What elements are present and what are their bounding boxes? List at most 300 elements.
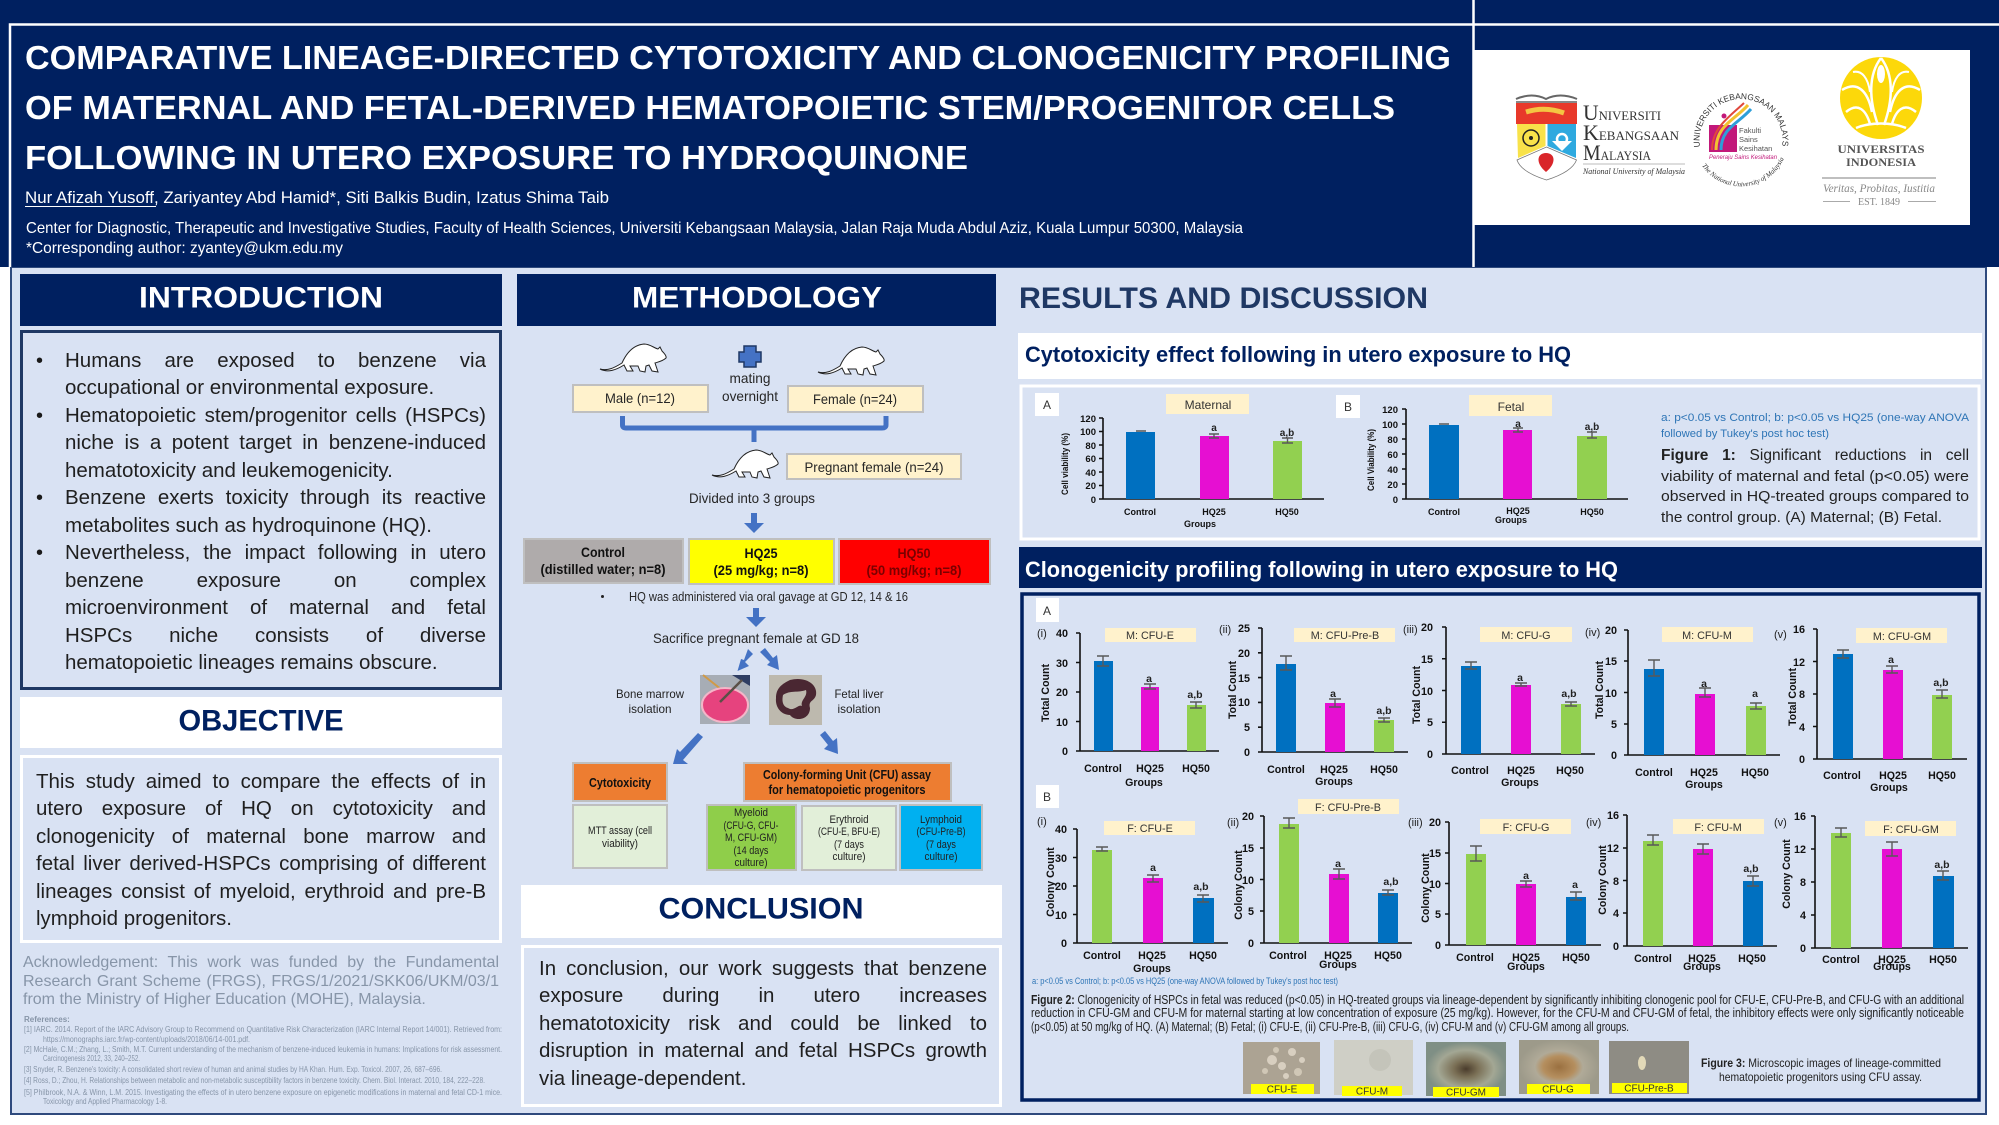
chart: maternal cell viability: Maternal — [1185, 398, 1231, 412]
chart: M CFU-M: 15 — [1605, 656, 1617, 668]
chart: F CFU-Pre-B: 15 — [1242, 843, 1254, 855]
panel: objective — [20, 697, 502, 942]
chart: M CFU-GM: a — [1888, 654, 1894, 666]
chart: M CFU-M — [1585, 625, 1780, 791]
chart: maternal cell viability: 20 — [1085, 481, 1096, 492]
chart: M CFU-GM: Total Count — [1787, 668, 1799, 726]
chart: M CFU-E: Groups — [1125, 777, 1163, 789]
introduction text box: Hematopoietic stem/progenitor cells (HSPCs) — [65, 404, 486, 426]
chart: F CFU-G: Control — [1456, 952, 1494, 964]
male box — [573, 385, 708, 412]
lymphoid box — [900, 805, 982, 870]
chart: F CFU-M: 12 — [1607, 843, 1619, 855]
chart: M CFU-M: (iv) — [1585, 627, 1600, 639]
chart: maternal cell viability: HQ25 — [1202, 507, 1226, 517]
panel letter A: A — [1043, 604, 1051, 618]
chart: M CFU-G — [1403, 622, 1595, 789]
chart: F CFU-G: 15 — [1429, 848, 1441, 860]
bone marrow label: Bone marrow — [616, 687, 684, 701]
chart: M CFU-Pre-B: (ii) — [1219, 624, 1231, 636]
introduction text box — [22, 332, 500, 688]
chart: M CFU-GM: 16 — [1793, 624, 1805, 636]
chart: F CFU-GM: Control — [1822, 954, 1860, 966]
chart: F CFU-Pre-B: 0 — [1248, 938, 1254, 950]
HQ50 group: HQ50 — [898, 545, 931, 561]
chart: M CFU-M: Groups — [1685, 779, 1723, 791]
chart: F CFU-E: 20 — [1055, 881, 1067, 893]
heading: methodology: METHODOLOGY — [632, 282, 882, 314]
arrows: assay branches — [673, 731, 838, 764]
chart: M CFU-G: 0 — [1427, 749, 1433, 761]
icon: male rat — [600, 344, 666, 372]
UKM wordmark: UNIVERSITI — [1583, 100, 1661, 125]
chart: M CFU-GM: 0 — [1799, 754, 1805, 766]
heading: cytotoxicity effect — [1018, 333, 1982, 379]
HQ50 group — [839, 539, 990, 584]
figure 3 caption: hematopoietic progenitors using CFU assay. — [1719, 1070, 1922, 1084]
lymphoid box: culture) — [924, 851, 958, 863]
UKM wordmark — [1582, 100, 1685, 176]
figure 2 caption: (p<0.05) at 50 mg/kg of HQ. (A) Maternal; (B) Fetal; (i) CFU-E, (ii) CFU-Pre-B, (iii) CFU-G, (iv) CFU-M and (v) CFU-GM among all groups. — [1031, 1020, 1629, 1034]
figure 1 caption — [1661, 446, 1969, 526]
chart: F CFU-M: F: CFU-M — [1694, 822, 1742, 834]
chart: M CFU-GM: HQ25 — [1879, 770, 1907, 782]
icon: Fakulti Sains Kesihatan seal: The National University of Malaysia — [1702, 157, 1784, 186]
chart: M CFU-E: HQ50 — [1182, 763, 1210, 775]
panel letter A: A — [1043, 398, 1051, 412]
affiliation: *Corresponding author: zyantey@ukm.edu.my — [26, 240, 343, 257]
chart: M CFU-GM: 4 — [1799, 722, 1805, 734]
chart: F CFU-Pre-B: HQ25 — [1324, 950, 1352, 962]
chart: maternal cell viability: 120 — [1080, 414, 1096, 425]
objective text box: lymphoid progenitors. — [36, 907, 232, 930]
chart: fetal cell viability: HQ25 — [1506, 506, 1530, 516]
chart: F CFU-E: a,b — [1193, 881, 1209, 893]
chart: M CFU-E: Control — [1084, 763, 1122, 775]
chart: F CFU-Pre-B: HQ50 — [1374, 950, 1402, 962]
chart: F CFU-GM: HQ25 — [1878, 954, 1906, 966]
references: [3] Snyder, R. Benzene's toxicity: A consolidated short review of human and animal studies by HA Khan. Hum. Exp. Toxicol. 2007, 26, 687–696. — [24, 1065, 442, 1074]
erythroid box: (CFU-E, BFU-E) — [818, 826, 880, 838]
figure 1 caption: Figure 1: Significant reductions in cell — [1661, 447, 1969, 464]
panel letter B: B — [1344, 400, 1352, 414]
chart: M CFU-E: HQ25 — [1136, 763, 1164, 775]
chart: F CFU-GM: 0 — [1800, 943, 1806, 955]
UI wordmark — [1822, 142, 1936, 208]
CFU assay box: for hematopoietic progenitors — [768, 782, 926, 797]
chart: M CFU-GM: a,b — [1933, 677, 1949, 689]
MTT assay box — [573, 805, 667, 868]
introduction text box: Benzene exerts toxicity through its reactive — [65, 486, 486, 509]
chart: F CFU-G: F: CFU-G — [1503, 822, 1549, 834]
chart: F CFU-Pre-B: Colony Count — [1233, 850, 1245, 920]
chart: M CFU-G: 15 — [1421, 654, 1433, 666]
myeloid box: culture) — [734, 857, 768, 869]
chart: F CFU-Pre-B: 10 — [1242, 875, 1254, 887]
myeloid box: Myeloid — [734, 807, 768, 819]
chart: M CFU-G: Control — [1451, 765, 1489, 777]
icon: Fakulti Sains Kesihatan seal: Sains — [1739, 135, 1758, 144]
chart: M CFU-Pre-B: 20 — [1238, 648, 1250, 660]
chart: M CFU-Pre-B: a — [1330, 688, 1336, 700]
chart: F CFU-E: 40 — [1055, 824, 1067, 836]
chart: M CFU-E: (i) — [1037, 628, 1047, 640]
figure 1 caption: observed in HQ-treated groups compared to — [1661, 489, 1969, 505]
introduction text box: • — [36, 350, 43, 372]
introduction text box: metabolites such as hydroquinone (HQ). — [65, 514, 432, 536]
micrograph: CFU-G: CFU-G — [1542, 1084, 1574, 1096]
chart: M CFU-G: 10 — [1421, 686, 1433, 698]
chart: maternal cell viability: 80 — [1085, 441, 1096, 452]
conclusion text box: exposure during in utero increases — [539, 984, 987, 1007]
bone marrow label — [616, 687, 684, 716]
introduction text box: hematotoxicity and leukemogenicity. — [65, 458, 393, 482]
chart: F CFU-GM — [1774, 811, 1968, 973]
acknowledgement: Research Grant Scheme (FRGS), FRGS/1/2021/SKK06/UKM/03/1 — [23, 972, 499, 990]
references: [1] IARC. 2014. Report of the IARC Advisory Group to Recommend on Quantitative Risk Characterization (IARC Internal Report 14/001). Retrieved from: — [24, 1025, 502, 1034]
panel letter A — [1036, 598, 1059, 622]
mating label — [722, 370, 778, 404]
panel: clonogenicity — [1022, 594, 1979, 1100]
chart: F CFU-GM: HQ50 — [1929, 954, 1957, 966]
acknowledgement — [23, 954, 499, 1012]
UI wordmark: INDONESIA — [1846, 155, 1916, 169]
chart: fetal cell viability: Cell Viability (%) — [1366, 429, 1377, 491]
chart: F CFU-Pre-B — [1227, 799, 1412, 971]
UI wordmark: UNIVERSITAS — [1838, 142, 1925, 156]
chart: M CFU-E: 40 — [1056, 628, 1068, 640]
chart: F CFU-G: 0 — [1435, 940, 1441, 952]
chart: M CFU-G: 20 — [1421, 622, 1433, 634]
UKM wordmark: National University of Malaysia — [1582, 166, 1685, 176]
chart: M CFU-GM: 8 — [1799, 689, 1805, 701]
control group: (distilled water; n=8) — [540, 561, 666, 577]
cytotoxicity box: Cytotoxicity — [589, 775, 652, 790]
divided label: Divided into 3 groups — [689, 490, 815, 506]
figure 3 micrographs — [1243, 1040, 1689, 1098]
male box: Male (n=12) — [605, 390, 675, 406]
chart: F CFU-E: 0 — [1061, 938, 1067, 950]
erythroid box — [802, 806, 896, 870]
mating label: overnight — [722, 388, 778, 404]
chart: maternal cell viability: Cell viability (%) — [1060, 433, 1071, 495]
HQ25 group — [689, 539, 834, 584]
chart: maternal cell viability: 60 — [1085, 454, 1096, 465]
chart: M CFU-E: 30 — [1056, 658, 1068, 670]
heading: conclusion: CONCLUSION — [658, 892, 864, 926]
heading: introduction — [20, 274, 502, 326]
references — [24, 1015, 502, 1106]
myeloid box: (CFU-G, CFU- — [724, 820, 779, 832]
introduction text box: niche is a potent target in benzene-induced — [65, 431, 486, 454]
introduction text box: benzene exposure on complex — [65, 568, 486, 592]
chart: F CFU-E: HQ50 — [1189, 950, 1217, 962]
chart: F CFU-Pre-B: a,b — [1383, 876, 1399, 888]
chart: M CFU-Pre-B: Total Count — [1227, 661, 1239, 719]
chart: M CFU-M: HQ25 — [1690, 767, 1718, 779]
chart: F CFU-GM: 8 — [1800, 877, 1806, 889]
arrow: down — [746, 608, 766, 627]
title: FOLLOWING IN UTERO EXPOSURE TO HYDROQUINONE — [25, 139, 968, 176]
chart: F CFU-M: 16 — [1607, 810, 1619, 822]
icon: UKM crest — [1516, 96, 1577, 180]
chart: M CFU-GM: M: CFU-GM — [1873, 631, 1931, 643]
pregnant female box — [787, 454, 961, 479]
chart: F CFU-M: a,b — [1743, 863, 1759, 875]
chart: M CFU-GM: 12 — [1793, 657, 1805, 669]
page background panel — [11, 267, 1986, 1114]
erythroid box: Erythroid — [830, 814, 868, 826]
panel letter A — [1035, 393, 1059, 416]
introduction text box: Nevertheless, the impact following in utero — [65, 541, 486, 564]
control group: Control — [581, 544, 625, 560]
chart: maternal cell viability: 100 — [1080, 427, 1096, 438]
chart: fetal cell viability: Groups — [1495, 515, 1527, 525]
chart: maternal cell viability: HQ50 — [1275, 507, 1299, 517]
female box: Female (n=24) — [813, 391, 897, 407]
bone marrow label: isolation — [628, 702, 672, 716]
affiliation — [26, 220, 1243, 257]
icon: female rat — [818, 347, 884, 375]
icon: Fakulti Sains Kesihatan seal: Peneraju Sains Kesihatan — [1709, 155, 1778, 161]
chart: F CFU-M: Groups — [1683, 961, 1721, 973]
chart: maternal cell viability: 0 — [1091, 495, 1096, 506]
statistics note: a: p<0.05 vs Control; b: p<0.05 vs HQ25 (one-way ANOVA — [1661, 412, 1970, 424]
chart: F CFU-GM: 16 — [1794, 811, 1806, 823]
panel: conclusion — [521, 885, 1002, 1106]
pregnant female box: Pregnant female (n=24) — [804, 459, 944, 475]
erythroid box: culture) — [832, 851, 866, 863]
chart: F CFU-M: 0 — [1613, 941, 1619, 953]
references: [5] Philbrook, N.A. & Winn, L.M. 2015. Investigating the effects of in utero benzene exposure on epigenetic modifications in maternal and fetal CD-1 mice. — [24, 1088, 502, 1097]
micrograph: CFU-GM — [1426, 1042, 1506, 1098]
chart: M CFU-M: Control — [1635, 767, 1673, 779]
control group — [524, 539, 683, 583]
chart: fetal cell viability: 0 — [1393, 495, 1398, 506]
acknowledgement: from the Ministry of Higher Education (MOHE), Malaysia. — [23, 991, 426, 1008]
chart: M CFU-Pre-B: 15 — [1238, 673, 1250, 685]
introduction text box: HSPCs niche consists of diverse — [65, 624, 486, 646]
objective text box: fetal liver derived-HSPCs comprising of different — [36, 852, 486, 875]
chart: F CFU-Pre-B: F: CFU-Pre-B — [1315, 802, 1381, 814]
chart: F CFU-G: Groups — [1507, 961, 1545, 973]
lymphoid box: (7 days — [926, 839, 956, 851]
chart: F CFU-Pre-B: Groups — [1319, 959, 1357, 971]
introduction text box: • — [36, 487, 43, 509]
chart: F CFU-Pre-B: 5 — [1248, 906, 1254, 918]
figure 3 caption — [1701, 1056, 1941, 1084]
chart: M CFU-M: Total Count — [1594, 661, 1606, 719]
MTT assay box: viability) — [602, 838, 638, 850]
chart: M CFU-G: HQ50 — [1556, 765, 1584, 777]
micrograph: CFU-E — [1243, 1042, 1320, 1096]
chart: maternal cell viability: 40 — [1085, 468, 1096, 479]
chart: F CFU-Pre-B: (ii) — [1227, 817, 1239, 829]
chart: F CFU-M: (iv) — [1586, 817, 1601, 829]
myeloid box — [707, 805, 796, 870]
introduction text box: • — [36, 542, 43, 564]
icon: pregnant rat — [712, 450, 778, 478]
chart: F CFU-GM: 12 — [1794, 844, 1806, 856]
chart: F CFU-E: F: CFU-E — [1127, 823, 1173, 835]
introduction text box: Humans are exposed to benzene via — [65, 348, 486, 372]
conclusion text box: disruption in maternal and fetal HSPCs growth — [539, 1039, 987, 1062]
chart: F CFU-G: Colony Count — [1420, 853, 1432, 923]
chart: fetal cell viability: 80 — [1387, 435, 1398, 446]
chart: M CFU-G: (iii) — [1403, 624, 1418, 636]
conclusion text box: via lineage-dependent. — [539, 1066, 746, 1090]
chart: fetal cell viability: 120 — [1382, 405, 1398, 416]
chart: M CFU-M: 20 — [1605, 625, 1617, 637]
chart: M CFU-E: 0 — [1062, 746, 1068, 758]
statistics note — [1661, 412, 1970, 440]
UI wordmark: Veritas, Probitas, Iustitia — [1823, 181, 1935, 195]
objective text box: This study aimed to compare the effects of in — [36, 770, 486, 792]
logos panel — [1474, 50, 1970, 225]
HQ25 group: (25 mg/kg; n=8) — [714, 562, 808, 578]
chart: M CFU-Pre-B — [1219, 623, 1408, 788]
chart: F CFU-G: a — [1523, 870, 1529, 882]
chart: M CFU-M: a — [1752, 688, 1758, 700]
chart: F CFU-E: (i) — [1037, 816, 1047, 828]
references: References: — [24, 1015, 70, 1024]
figure 1 caption: the control group. (A) Maternal; (B) Fetal. — [1661, 510, 1942, 526]
chart: M CFU-Pre-B: 0 — [1244, 747, 1250, 759]
micrograph: CFU-E: CFU-E — [1267, 1084, 1298, 1096]
chart: M CFU-M: 5 — [1611, 719, 1617, 731]
chart: M CFU-M: HQ50 — [1741, 767, 1769, 779]
mating label: mating — [730, 370, 770, 386]
chart: fetal cell viability — [1366, 395, 1628, 525]
chart: F CFU-G: 5 — [1435, 909, 1441, 921]
chart: M CFU-Pre-B: 5 — [1244, 722, 1250, 734]
objective text box: lineages consist of myeloid, erythroid and pre-B — [36, 880, 486, 902]
title: OF MATERNAL AND FETAL-DERIVED HEMATOPOIETIC STEM/PROGENITOR CELLS — [25, 89, 1395, 126]
chart: M CFU-Pre-B: Groups — [1315, 776, 1353, 788]
chart: F CFU-M: HQ50 — [1738, 953, 1766, 965]
erythroid box: (7 days — [834, 839, 864, 851]
objective text box: utero exposure of HQ on cytotoxicity and — [36, 797, 486, 820]
chart: M CFU-Pre-B: HQ50 — [1370, 764, 1398, 776]
objective text box — [22, 756, 500, 942]
chart: fetal cell viability: a — [1515, 419, 1521, 430]
icon: fetal liver — [769, 675, 822, 725]
panel: figure 1 — [1021, 386, 1979, 539]
myeloid box: (14 days — [734, 845, 769, 857]
chart: F CFU-E: Control — [1083, 950, 1121, 962]
chart: fetal cell viability: HQ50 — [1580, 507, 1604, 517]
chart: F CFU-GM: Colony Count — [1781, 839, 1793, 909]
heading: methodology — [517, 274, 996, 326]
statistics note: followed by Tukey's post hoc test) — [1661, 428, 1829, 440]
chart: fetal cell viability: 100 — [1382, 420, 1398, 431]
introduction text box: occupational or environmental exposure. — [65, 376, 434, 399]
chart: fetal cell viability: Fetal — [1498, 400, 1524, 414]
female box — [788, 386, 923, 412]
myeloid box: M, CFU-GM) — [725, 832, 777, 844]
chart: M CFU-G: Total Count — [1411, 666, 1423, 724]
statistics note: a: p<0.05 vs Control; b: p<0.05 vs HQ25 (one-way ANOVA followed by Tukey's post hoc test) — [1032, 976, 1338, 986]
chart: fetal cell viability: 40 — [1387, 465, 1398, 476]
CFU assay box — [744, 763, 951, 801]
chart: M CFU-G: M: CFU-G — [1501, 630, 1551, 642]
references: [2] McHale, C.M.; Zhang, L.; Smith, M.T. Current understanding of the mechanism of benzene-induced leukemia in humans: Implications for risk assessment. — [24, 1045, 502, 1054]
chart: M CFU-M: 0 — [1611, 750, 1617, 762]
acknowledgement: Acknowledgement: This work was funded by the Fundamental — [23, 954, 499, 971]
affiliation: Center for Diagnostic, Therapeutic and Investigative Studies, Faculty of Health Sciences, Universiti Kebangsaan Malaysia, Jalan Raja Muda Abdul Aziz, Kuala Lumpur 50300, Malaysia — [26, 220, 1243, 237]
chart: F CFU-Pre-B: 20 — [1242, 811, 1254, 823]
chart: M CFU-GM: Groups — [1870, 782, 1908, 794]
chart: M CFU-GM — [1774, 624, 1967, 794]
conclusion text box: hematotoxicity risk and could be linked to — [539, 1012, 987, 1034]
chart: M CFU-Pre-B: a,b — [1376, 705, 1392, 717]
chart: M CFU-Pre-B: 25 — [1238, 623, 1250, 635]
chart: M CFU-E — [1037, 628, 1219, 789]
chart: M CFU-GM: Control — [1823, 770, 1861, 782]
chart: F CFU-M: HQ25 — [1688, 953, 1716, 965]
references: https://monographs.iarc.fr/wp-content/uploads/2018/06/14-001.pdf. — [43, 1035, 250, 1044]
references: Carcinogenesis 2012, 33, 240–252. — [43, 1054, 140, 1063]
chart: M CFU-M: M: CFU-M — [1682, 630, 1732, 642]
panel letter B — [1036, 785, 1059, 808]
authors: Nur Afizah Yusoff, Zariyantey Abd Hamid*, Siti Balkis Budin, Izatus Shima Taib — [25, 188, 609, 207]
references: [4] Ross, D.; Zhou, H. Relationships between metabolic and non-metabolic susceptibility factors in benzene toxicity. Chem. Biol. Interact. 2010, 184, 222–228. — [24, 1076, 485, 1085]
sacrifice label: Sacrifice pregnant female at GD 18 — [653, 630, 859, 646]
chart: F CFU-E — [1037, 816, 1228, 975]
chart: F CFU-G: (iii) — [1408, 817, 1423, 829]
MTT assay box: MTT assay (cell — [588, 825, 652, 837]
chart: maternal cell viability: Groups — [1184, 519, 1216, 529]
chart: F CFU-G: HQ50 — [1562, 952, 1590, 964]
figure 2 caption — [1031, 993, 1964, 1034]
arrow: down — [744, 513, 764, 533]
chart: M CFU-M: 10 — [1605, 688, 1617, 700]
title: COMPARATIVE LINEAGE-DIRECTED CYTOTOXICITY AND CLONOGENICITY PROFILING — [25, 39, 1451, 76]
chart: F CFU-E: a — [1150, 862, 1156, 874]
fetal liver label: isolation — [838, 702, 880, 716]
chart: M CFU-Pre-B: Control — [1267, 764, 1305, 776]
chart: M CFU-G: HQ25 — [1507, 765, 1535, 777]
fetal liver label — [834, 687, 884, 716]
arrow: merge bracket — [622, 416, 886, 442]
chart: F CFU-GM: 4 — [1800, 910, 1806, 922]
arrows: split — [738, 648, 779, 671]
introduction text box: microenvironment of maternal and fetal — [65, 596, 486, 619]
chart: maternal cell viability: a,b — [1280, 428, 1294, 439]
chart: F CFU-E: HQ25 — [1138, 950, 1166, 962]
chart: F CFU-G: HQ25 — [1512, 952, 1540, 964]
heading: objective: OBJECTIVE — [178, 704, 344, 738]
fetal liver label: Fetal liver — [834, 687, 884, 701]
CFU assay box: Colony-forming Unit (CFU) assay — [763, 767, 932, 782]
chart: F CFU-GM: Groups — [1873, 961, 1911, 973]
chart: M CFU-E: 10 — [1056, 717, 1068, 729]
icon: Fakulti Sains Kesihatan seal: Kesihatan — [1739, 144, 1772, 153]
chart: maternal cell viability: Control — [1124, 507, 1156, 517]
objective text box: clonogenicity of maternal bone marrow and — [36, 824, 486, 848]
micrograph: CFU-G — [1519, 1040, 1599, 1096]
chart: F CFU-G: a — [1572, 879, 1578, 891]
heading: conclusion — [521, 885, 1002, 938]
heading: cytotoxicity effect: Cytotoxicity effect following in utero exposure to HQ — [1025, 342, 1571, 367]
references: Toxicology and Applied Pharmacology 1-8. — [43, 1097, 167, 1106]
figure 3 caption: Figure 3: Microscopic images of lineage-committed — [1701, 1056, 1941, 1070]
micrograph: CFU-GM: CFU-GM — [1446, 1088, 1486, 1098]
cytotoxicity box — [573, 763, 667, 801]
heading: results and discussion: RESULTS AND DISCUSSION — [1019, 282, 1428, 315]
chart: M CFU-E: a,b — [1187, 689, 1203, 701]
chart: F CFU-G — [1408, 817, 1601, 973]
